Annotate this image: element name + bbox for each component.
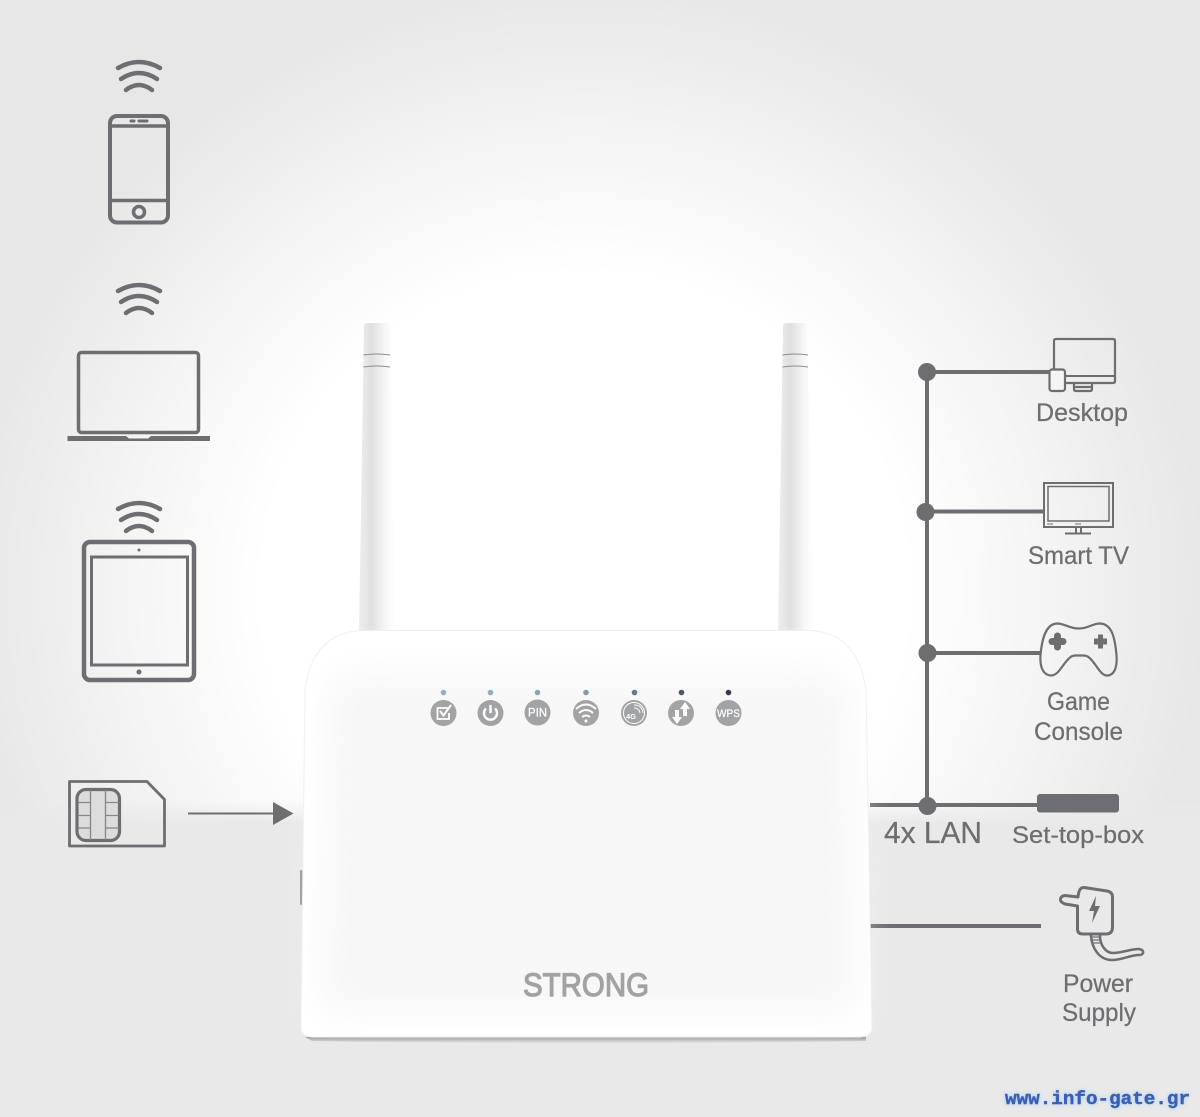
status LEDs — [441, 690, 731, 695]
label: Power Supply: Supply — [1062, 999, 1136, 1027]
arrow: SIM into router — [188, 802, 294, 825]
icon: SIM card — [70, 782, 164, 846]
label: Power Supply — [1062, 970, 1136, 1027]
label: Desktop: Desktop — [1036, 399, 1128, 427]
icon: smart TV — [1044, 483, 1113, 534]
icon: wifi above laptop — [118, 285, 160, 313]
router body — [300, 630, 872, 1043]
label: Set-top-box: Set-top-box — [1012, 822, 1144, 849]
icon: 4G: 4G — [626, 712, 636, 721]
icon: data arrows — [668, 700, 694, 726]
label: Game Console: Console — [1034, 718, 1123, 746]
LAN connection lines — [870, 363, 1052, 815]
icon: smartphone — [110, 116, 168, 222]
label: Power Supply: Power — [1063, 970, 1133, 998]
icon: WPS — [716, 700, 742, 726]
left antenna — [359, 323, 395, 632]
icon: tablet — [84, 542, 194, 680]
label: Smart TV: Smart TV — [1028, 542, 1129, 570]
icon: desktop — [1050, 339, 1115, 391]
icon: wifi above tablet — [118, 503, 160, 531]
icon: power supply — [1060, 887, 1143, 960]
icon: wifi — [573, 700, 599, 726]
icon: laptop — [68, 352, 210, 441]
icon: PIN — [524, 700, 550, 726]
power line — [870, 924, 1041, 928]
label: 4x LAN: 4x LAN — [884, 815, 982, 850]
icon: set-top-box — [1037, 794, 1119, 812]
icon: game console — [1040, 624, 1117, 676]
icon: PIN: PIN — [528, 708, 547, 720]
icon: 4G — [621, 700, 647, 726]
icon: power — [478, 700, 504, 726]
label: Game Console — [1034, 688, 1123, 746]
status icons — [430, 700, 742, 726]
icon: check — [430, 700, 456, 726]
label: Game Console: Game — [1047, 688, 1110, 716]
right antenna — [778, 323, 814, 632]
brand logo: STRONG — [523, 967, 649, 1003]
icon: wifi above phone — [118, 62, 160, 90]
watermark: www.info-gate.gr — [1005, 1090, 1190, 1110]
icon: WPS: WPS — [717, 708, 740, 720]
